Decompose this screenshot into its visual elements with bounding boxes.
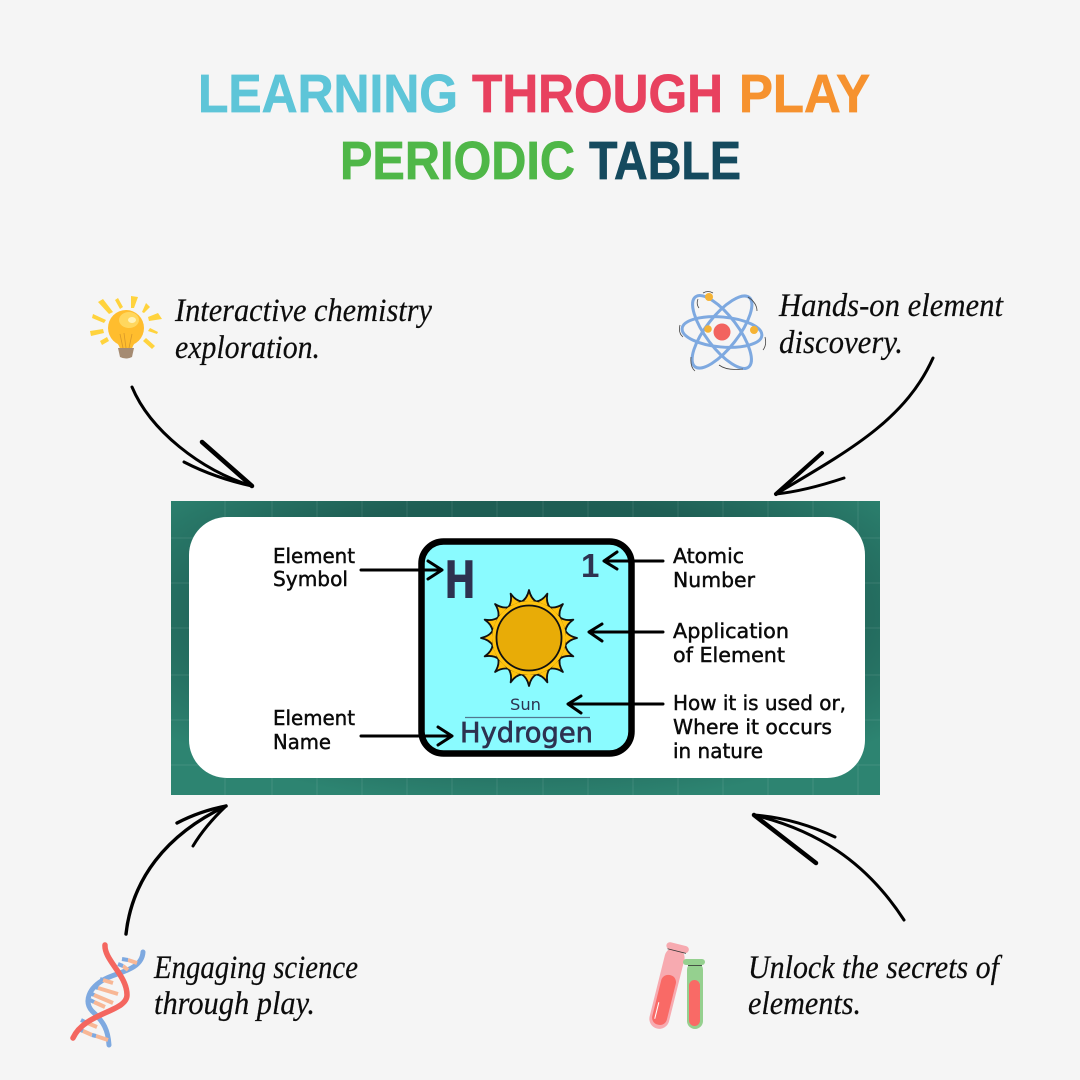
- text: unlock the secrets of elements: Unlock the secrets of: [748, 950, 1002, 986]
- white card: [189, 517, 865, 778]
- callout: element name: Name: [273, 730, 331, 754]
- pink tube: [646, 941, 690, 1031]
- text: engaging science through play: Engaging science: [153, 950, 358, 986]
- element symbol: H: [444, 551, 476, 611]
- title: TABLE: [589, 131, 741, 191]
- callout: how it is used: [568, 691, 846, 763]
- callout: atomic number: Number: [673, 568, 756, 592]
- element cell: [422, 542, 632, 754]
- arrow: bottom right: [754, 815, 904, 920]
- callout: element symbol: [273, 544, 442, 591]
- icon: test tubes: [646, 941, 705, 1031]
- text: engaging science through play: through play.: [154, 986, 315, 1022]
- application label: Sun: [510, 695, 541, 714]
- text: unlock the secrets of elements: elements.: [748, 986, 861, 1022]
- element name: Hydrogen: [460, 716, 593, 749]
- callout: application of element: of Element: [673, 643, 785, 667]
- icon: dna: [73, 945, 143, 1045]
- callout: atomic number: [604, 544, 756, 592]
- callout: element name: [273, 706, 452, 754]
- callout: how it is used: Where it occurs: [673, 715, 832, 739]
- icon: atom: [679, 287, 766, 377]
- callout: element name: Element: [273, 706, 355, 730]
- panel: element key: [171, 501, 880, 795]
- text: interactive chemistry exploration: [174, 293, 432, 366]
- arrow: top right: [776, 358, 933, 494]
- text: unlock the secrets of elements: [748, 950, 1002, 1022]
- atomic number: 1: [581, 547, 599, 584]
- green tube: [687, 962, 703, 1029]
- text: hands-on element discovery: discovery.: [779, 325, 903, 361]
- arrow: top left: [132, 387, 252, 486]
- callout: how it is used: in nature: [673, 739, 763, 763]
- callout: atomic number: Atomic: [673, 544, 744, 568]
- callout: element symbol: Symbol: [273, 567, 348, 591]
- text: interactive chemistry exploration: exploration.: [175, 330, 320, 366]
- callout: element symbol: Element: [273, 544, 355, 568]
- text: hands-on element discovery: [778, 288, 1004, 361]
- text: interactive chemistry exploration: Interactive chemistry: [174, 293, 432, 329]
- icon: light bulb: [90, 296, 162, 358]
- callout: application of element: [589, 619, 789, 667]
- callout: application of element: Application: [673, 619, 789, 643]
- text: hands-on element discovery: Hands-on element: [778, 288, 1004, 324]
- arrow: bottom left: [126, 806, 226, 934]
- icon: sun: [481, 590, 577, 686]
- title: THROUGH: [472, 64, 723, 124]
- title: PLAY: [739, 64, 870, 124]
- title: LEARNING: [198, 64, 458, 124]
- text: engaging science through play: [153, 950, 358, 1022]
- callout: how it is used: How it is used or,: [673, 691, 846, 715]
- title: [198, 64, 870, 191]
- panel background: [171, 501, 880, 795]
- title: PERIODIC: [340, 131, 575, 191]
